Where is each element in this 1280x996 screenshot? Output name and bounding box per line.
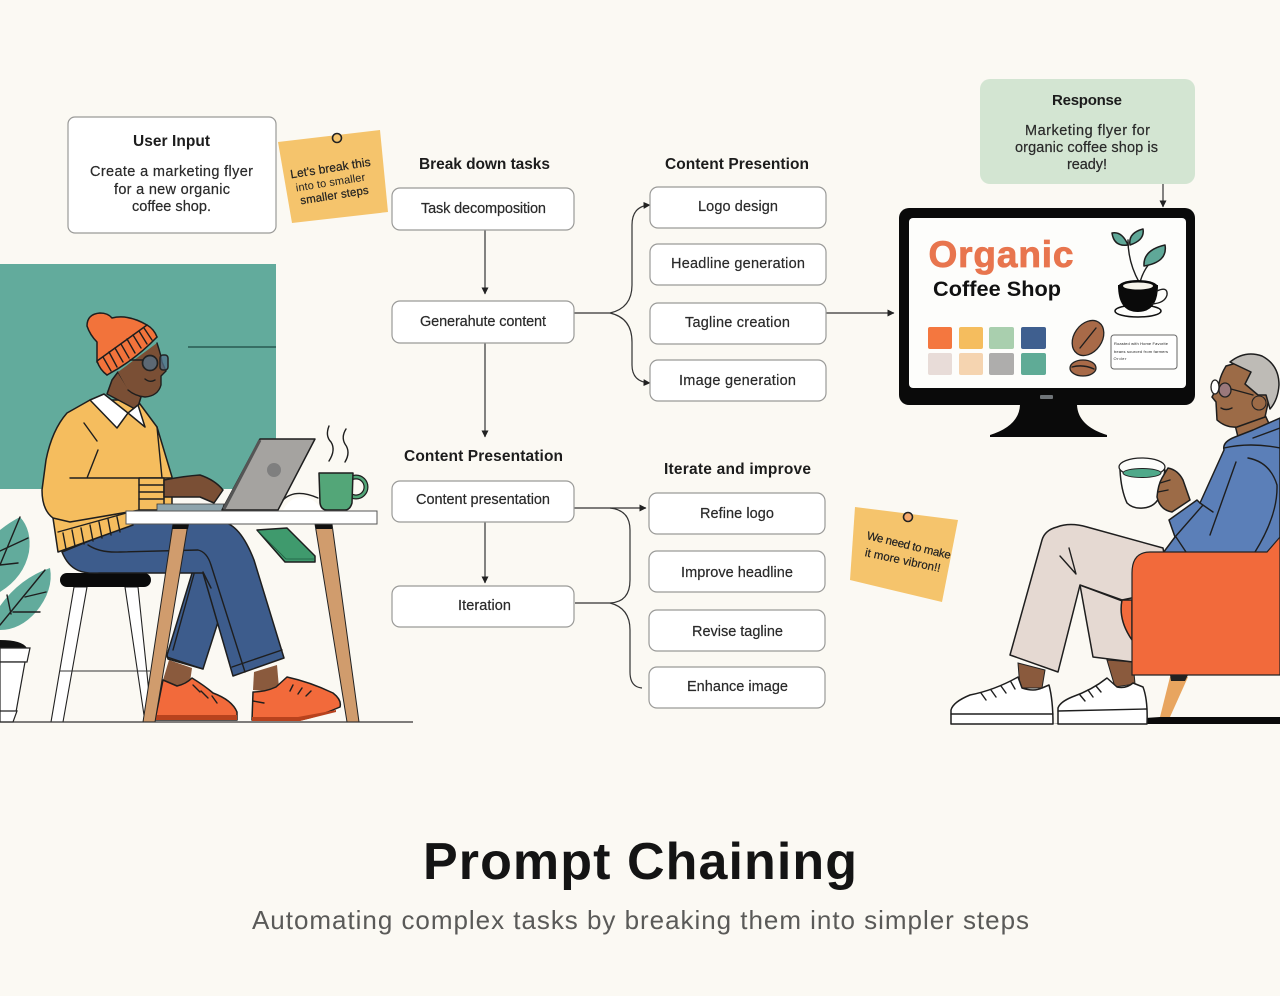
steam xyxy=(327,426,348,462)
ear xyxy=(1252,396,1266,410)
face xyxy=(1212,362,1272,427)
small text card: beans sourced from farmers xyxy=(1114,349,1168,354)
illustration: person at laptop xyxy=(42,313,340,721)
ankles xyxy=(1018,663,1045,688)
desk legs xyxy=(143,524,188,722)
card: user input: User Input xyxy=(133,133,210,150)
step: iteration: Iteration xyxy=(458,598,511,614)
chair xyxy=(1121,600,1132,640)
illustration: stool xyxy=(51,573,152,722)
ankles xyxy=(163,660,192,688)
face xyxy=(118,343,166,397)
step: iteration xyxy=(392,586,574,627)
step: image generation xyxy=(650,360,826,401)
card: user input: coffee shop. xyxy=(132,199,211,215)
step: logo design: Logo design xyxy=(698,199,778,215)
monitor frame xyxy=(899,208,1195,405)
step: tagline creation: Tagline creation xyxy=(685,315,790,331)
step: improve headline xyxy=(649,551,825,592)
cup xyxy=(1120,470,1165,508)
hat xyxy=(87,313,157,375)
step: task decomposition xyxy=(392,188,574,230)
floor wedge xyxy=(1052,717,1280,724)
sticky note: break it: Let's break this xyxy=(289,155,371,181)
icon: coffee cup with sprout xyxy=(1112,229,1167,317)
step: logo design xyxy=(650,187,826,228)
monitor screen xyxy=(909,218,1186,388)
step: enhance image xyxy=(649,667,825,708)
mug handle xyxy=(346,477,366,497)
small text card: Order xyxy=(1114,356,1127,361)
illustration: plant in pot xyxy=(0,517,51,722)
glasses xyxy=(142,356,158,370)
desk top xyxy=(126,511,377,524)
shoes xyxy=(155,678,237,720)
illustration: monitor xyxy=(899,208,1195,437)
laptop lid xyxy=(222,439,315,510)
mug handle inner xyxy=(346,477,366,497)
card: user input xyxy=(68,117,276,233)
icon: coffee beans xyxy=(1066,314,1110,376)
sticky note: feedback: it more vibron!! xyxy=(864,547,942,575)
floor line left xyxy=(0,721,413,723)
sweater xyxy=(42,400,172,522)
step: improve headline: Improve headline xyxy=(681,565,793,581)
notebook xyxy=(257,528,315,562)
card: response xyxy=(980,79,1195,184)
sticky note: break it xyxy=(278,130,388,223)
heading: content presention: Content Presention xyxy=(665,156,809,173)
step: enhance image: Enhance image xyxy=(687,679,788,695)
card: response: Marketing flyer for xyxy=(1025,123,1150,139)
title: Prompt Chaining xyxy=(423,833,857,891)
subtitle: Automating complex tasks by breaking them into simpler steps xyxy=(252,905,1029,935)
front leg xyxy=(62,522,284,676)
front trouser leg xyxy=(1010,524,1170,672)
card: response: organic coffee shop is xyxy=(1015,140,1158,156)
step: tagline creation xyxy=(650,303,826,344)
cuff xyxy=(139,478,164,510)
laptop base xyxy=(157,504,224,511)
hand xyxy=(1157,468,1190,512)
card: user input: Create a marketing flyer xyxy=(90,164,253,180)
heading: iterate and improve: Iterate and improve xyxy=(664,461,811,478)
step: headline generation xyxy=(650,244,826,285)
wall line xyxy=(188,346,276,348)
heading: break down tasks: Break down tasks xyxy=(419,156,550,173)
sticky note: break it: smaller steps xyxy=(300,185,370,207)
card: user input: for a new organic xyxy=(114,182,230,198)
chair leg xyxy=(1160,677,1188,717)
neck xyxy=(1235,415,1272,445)
step: task decomposition: Task decomposition xyxy=(421,201,546,217)
sticky note: feedback xyxy=(850,507,958,602)
hair xyxy=(1230,354,1279,409)
headphones xyxy=(283,497,322,510)
step: revise tagline xyxy=(649,610,825,651)
card: response: Response xyxy=(1052,92,1122,109)
step: refine logo xyxy=(649,493,825,534)
colour palette xyxy=(928,327,1046,375)
step: headline generation: Headline generation xyxy=(671,256,805,272)
illustration: desk with laptop xyxy=(126,426,377,722)
small text card: Roasted with Home Favorite xyxy=(1114,341,1169,346)
step: content presentation: Content presentation xyxy=(416,492,550,508)
sweater hem xyxy=(53,505,133,552)
step: revise tagline: Revise tagline xyxy=(692,624,783,640)
flow: connectors xyxy=(485,184,1163,688)
flyer subhead: Coffee Shop xyxy=(933,276,1061,301)
step: refine logo: Refine logo xyxy=(700,506,774,522)
sticky note: break it: into to smaller xyxy=(295,172,366,194)
monitor stand xyxy=(990,405,1107,437)
small text card xyxy=(1111,335,1177,369)
hoodie xyxy=(1163,418,1280,553)
sticky note: feedback: We need to make xyxy=(865,530,952,562)
mug xyxy=(319,473,353,510)
back trouser leg xyxy=(1080,585,1133,662)
hand xyxy=(164,475,223,503)
step: image generation: Image generation xyxy=(679,373,796,389)
neck xyxy=(107,372,141,410)
panel: teal wall background xyxy=(0,264,276,489)
back leg xyxy=(167,570,240,669)
step: generate content: Generahute content xyxy=(420,314,546,330)
card: response: ready! xyxy=(1067,157,1107,173)
glasses xyxy=(1219,383,1231,397)
heading: content presentation: Content Presentation xyxy=(404,448,563,465)
step: generate content xyxy=(392,301,574,343)
shoes xyxy=(951,677,1053,724)
illustration: person with coffee on armchair xyxy=(951,354,1280,724)
step: content presentation xyxy=(392,481,574,522)
flyer headline: Organic xyxy=(928,234,1074,275)
collar xyxy=(90,394,128,428)
